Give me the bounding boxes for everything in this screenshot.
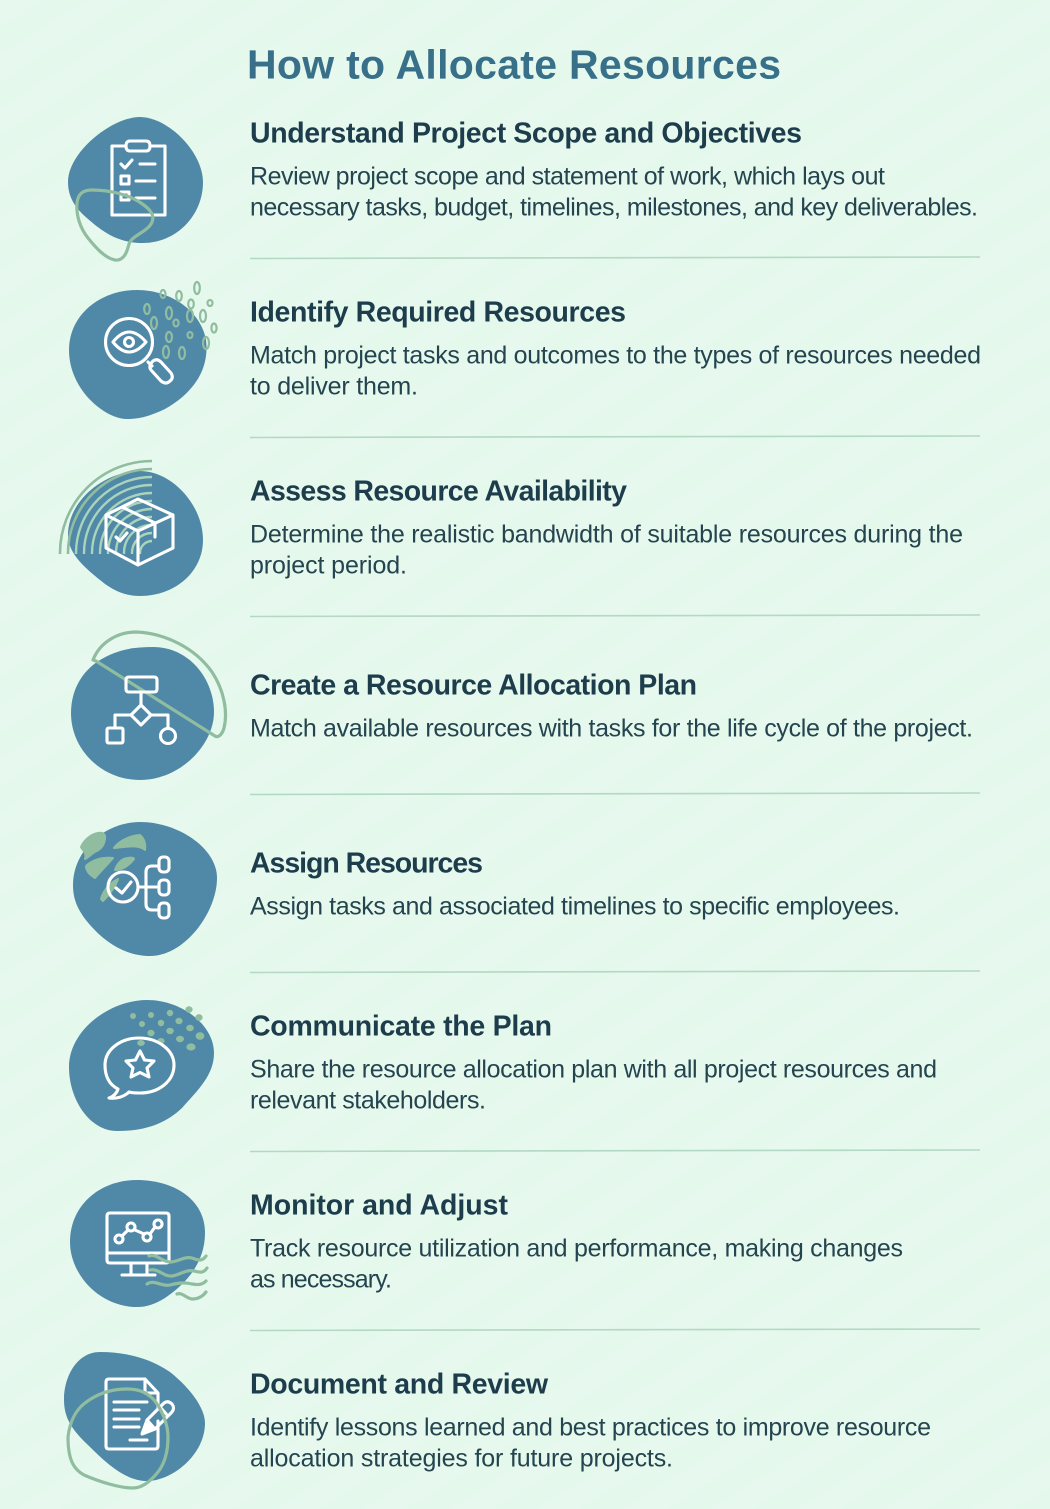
heading: Document and Review [250, 1368, 549, 1400]
heading: Identify Required Resources [250, 296, 626, 328]
icon: task hierarchy [73, 822, 217, 956]
description: Match project tasks and outcomes to the types of resources needed [250, 342, 981, 370]
heading: Assign Resources [250, 848, 483, 880]
panel: step 7 [70, 1180, 903, 1307]
description: as necessary. [250, 1266, 392, 1294]
panel: step 5 [73, 822, 900, 956]
description [250, 1414, 931, 1472]
icon: document with pencil [64, 1352, 205, 1488]
description [250, 342, 981, 400]
panel: step 4 [71, 632, 973, 780]
panel: step 3 [58, 460, 962, 596]
description: Review project scope and statement of work, which lays out [250, 162, 885, 190]
description: Assign tasks and associated timelines to specific employees. [250, 892, 900, 920]
panel: step 1 [68, 117, 978, 260]
description [250, 1234, 903, 1294]
description: Share the resource allocation plan with all project resources and [250, 1056, 937, 1084]
description: relevant stakeholders. [250, 1086, 486, 1114]
description: Determine the realistic bandwidth of suitable resources during the [250, 520, 963, 548]
description: project period. [250, 552, 407, 580]
heading: Assess Resource Availability [250, 476, 627, 508]
panel: step 8 [64, 1352, 931, 1488]
icon: speech bubble with star [69, 1000, 214, 1131]
description: to deliver them. [250, 372, 418, 400]
icon: package box [58, 460, 203, 596]
heading: Communicate the Plan [250, 1010, 552, 1042]
heading: Create a Resource Allocation Plan [250, 670, 697, 702]
title: How to Allocate Resources [247, 42, 781, 88]
icon: magnifying glass with eye [69, 282, 217, 419]
description: Identify lessons learned and best practices to improve resource [250, 1414, 931, 1442]
description: Match available resources with tasks for the life cycle of the project. [250, 714, 973, 742]
icon: flowchart [71, 632, 226, 780]
panel: step 6 [69, 1000, 937, 1131]
description: Track resource utilization and performance, making changes [250, 1234, 903, 1262]
panel: step 2 [69, 282, 981, 419]
description [250, 162, 978, 222]
description [250, 520, 963, 580]
icon: clipboard checklist [68, 117, 203, 260]
heading: Monitor and Adjust [250, 1190, 508, 1222]
description: allocation strategies for future projects. [250, 1444, 673, 1472]
icon: monitor with chart [70, 1180, 207, 1307]
description: necessary tasks, budget, timelines, milestones, and key deliverables. [250, 194, 978, 222]
heading: Understand Project Scope and Objectives [250, 118, 802, 150]
description [250, 1056, 937, 1114]
